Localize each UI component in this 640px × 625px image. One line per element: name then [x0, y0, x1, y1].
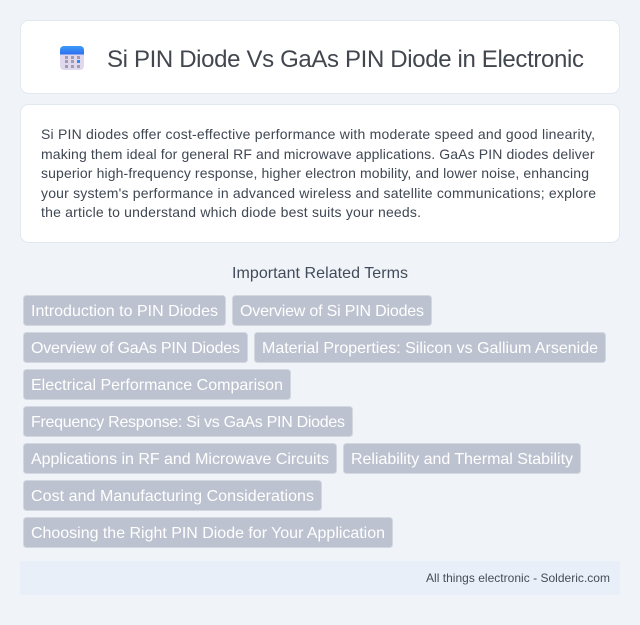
tag: introduction: [24, 296, 226, 326]
paragraph line 1: Si PIN diodes offer cost-effective performance with moderate speed and good linearity,: [41, 126, 595, 142]
tag: overview gaas: [24, 332, 248, 362]
tag: electrical performance: [24, 370, 290, 400]
heading: important related terms: Important Related Terms: [232, 265, 408, 282]
footer: [20, 561, 620, 595]
tag: material properties: [254, 332, 606, 362]
tag: cost: [24, 480, 322, 510]
paragraph line 5: the article to understand which diode best suits your needs.: [41, 204, 421, 220]
tag: applications: Applications in RF and Microwave Circuits: [31, 451, 329, 468]
panel: summary paragraph: [20, 104, 620, 242]
tag: overview si: [232, 296, 432, 326]
tag: choosing: Choosing the Right PIN Diode for Your Application: [31, 525, 385, 542]
footer credit: All things electronic - Solderic.com: [426, 571, 610, 585]
paragraph line 3: superior high-frequency response, higher electron mobility, and lower noise, enhancing: [41, 165, 589, 181]
tag: introduction: Introduction to PIN Diodes: [31, 303, 218, 320]
tag: choosing: [24, 518, 392, 548]
tag: overview gaas: Overview of GaAs PIN Diodes: [31, 340, 240, 357]
paragraph line 4: your system's performance in advanced wireless and satellite communications; explore: [41, 185, 596, 201]
title: Si PIN Diode Vs GaAs PIN Diode in Electronic: [107, 46, 584, 73]
tag: reliability: [344, 444, 580, 474]
tag: cost: Cost and Manufacturing Considerations: [31, 488, 314, 505]
panel: header: [20, 20, 620, 94]
paragraph line 2: making them ideal for general RF and microwave applications. GaAs PIN diodes deliver: [41, 146, 595, 162]
tag: electrical performance: Electrical Performance Comparison: [31, 377, 283, 394]
tag: reliability: Reliability and Thermal Stability: [351, 451, 573, 468]
tag: frequency response: [24, 406, 352, 436]
tag: overview si: Overview of Si PIN Diodes: [240, 303, 424, 320]
panel: term tags: [24, 296, 606, 548]
tag: frequency response: Frequency Response: Si vs GaAs PIN Diodes: [31, 414, 345, 431]
tag: applications: [24, 444, 336, 474]
tag: material properties: Material Properties: Silicon vs Gallium Arsenide: [262, 340, 598, 357]
icon: calendar: [60, 46, 84, 70]
